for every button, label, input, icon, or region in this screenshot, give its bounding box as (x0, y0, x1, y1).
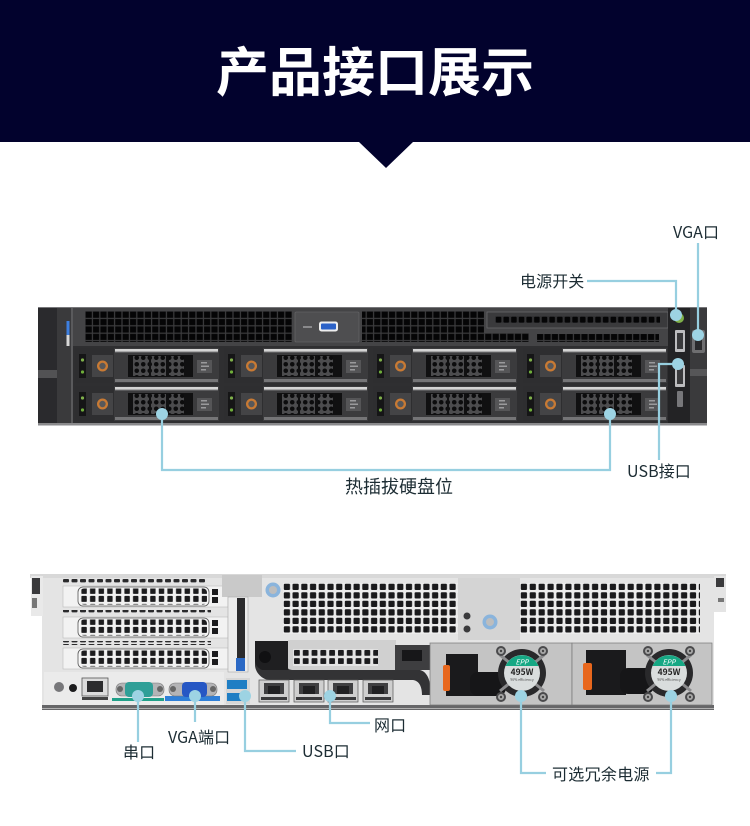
drive bays (75, 348, 667, 421)
label: VGA口: VGA口 (673, 219, 719, 243)
title: 产品接口展示 (216, 31, 534, 107)
front server chassis (38, 307, 707, 426)
optical blank panel (487, 312, 668, 328)
power supply 2 (572, 643, 712, 705)
screw pair (464, 612, 470, 632)
header banner (0, 0, 750, 168)
label: USB口: USB口 (302, 738, 350, 762)
front callout dots (156, 309, 704, 420)
rear vent left (283, 583, 458, 634)
left edge bracket (31, 576, 43, 616)
right control panel (668, 308, 690, 423)
network ports (259, 680, 393, 702)
centre bracket plate (458, 578, 520, 640)
rear vent right (520, 583, 700, 634)
label: 可选冗余电源: 可选冗余电源 (552, 761, 650, 785)
right ear with VGA (690, 308, 707, 423)
label: USB接口: USB接口 (627, 458, 691, 482)
riser latch screw right (482, 614, 498, 630)
small centre plate and vent (288, 640, 396, 670)
left I/O plate (44, 672, 224, 705)
left vent (85, 311, 292, 342)
rear callout dots (132, 690, 677, 702)
label: 串口: 串口 (123, 739, 155, 763)
USB 3.0 panel (295, 312, 359, 342)
PCI slots (63, 586, 228, 669)
power supply 1 (430, 643, 572, 705)
middle vent (362, 311, 529, 342)
VGA port (165, 682, 220, 701)
top bezel (73, 308, 668, 346)
label: 热插拔硬盘位: 热插拔硬盘位 (345, 473, 453, 499)
rear callout lines (138, 696, 671, 773)
rear server chassis (30, 574, 726, 710)
label: VGA端口: VGA端口 (168, 724, 230, 748)
front callout lines (162, 243, 698, 470)
network riser cable arm (255, 641, 431, 695)
narrow riser slot (222, 575, 262, 672)
lower vent strip (537, 334, 659, 342)
serial port (112, 682, 164, 701)
top dash row (62, 578, 207, 583)
label: 网口: 网口 (374, 712, 406, 736)
left ear (38, 308, 73, 423)
label: 电源开关: 电源开关 (520, 268, 584, 292)
right edge bracket (714, 576, 726, 612)
rear USB ports (226, 678, 250, 704)
riser latch screw (266, 582, 280, 598)
